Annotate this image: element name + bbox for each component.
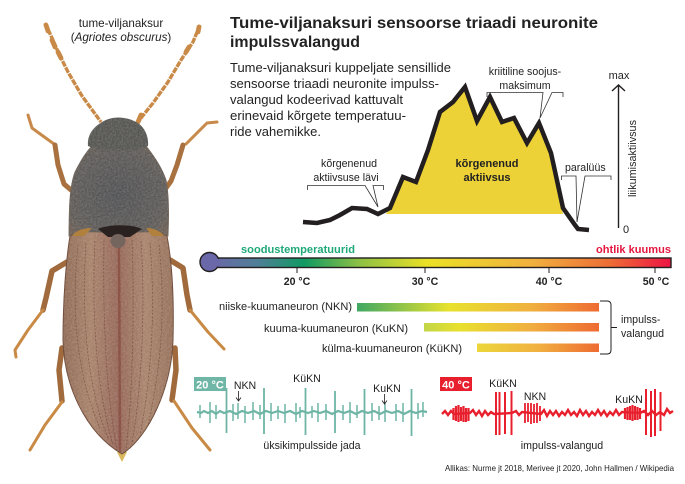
- title: [230, 15, 598, 51]
- source credit: Allikas: Nurme jt 2018, Merivee jt 2020, John Hallmen / Wikipedia: [445, 463, 674, 473]
- chart label: elevated activity: [456, 158, 518, 184]
- icon: beetle elytra: [63, 228, 173, 454]
- burst label: NKN: NKN: [524, 391, 546, 403]
- intro text: erinevaid kõrgete temperatuu-: [230, 108, 406, 123]
- icon: beetle abdomen tip: [117, 452, 127, 462]
- title: impulssvalangud: [230, 34, 360, 51]
- scale ticks: [297, 267, 655, 273]
- axis: locomotor activity arrow: liikumisaktiivsus: [627, 120, 639, 197]
- spike label: NKN: NKN: [234, 380, 256, 392]
- chart label: elevated activity: aktiivsus: [463, 172, 511, 184]
- waveform: bursts: [442, 389, 673, 437]
- icon: beetle legs: [15, 115, 224, 450]
- bracket: impulse bursts: impulss-: [621, 314, 661, 326]
- neuron range: NKN: [219, 301, 599, 313]
- intro text: ride vahemikke.: [230, 124, 321, 139]
- intro text: valangud kodeerivad kattuvalt: [230, 92, 403, 107]
- callout: activity threshold: kõrgenenud: [321, 158, 377, 170]
- bursts at 40 °C: [440, 377, 673, 452]
- temperature scale: [200, 244, 671, 288]
- scale zone labels: [241, 244, 671, 256]
- beetle label: (Agriotes obscurus): [71, 31, 171, 44]
- burst label: KüKN: KüKN: [489, 378, 517, 390]
- title: Tume-viljanaksuri sensoorse triaadi neuronite: [230, 15, 598, 32]
- callout: activity threshold: [308, 158, 384, 207]
- axis: locomotor activity arrow: [609, 70, 639, 236]
- scale temperature labels: 20 °C: [284, 276, 311, 288]
- neuron range: NKN: niiske-kuumaneuron (NKN): [219, 301, 352, 313]
- spike label: NKN: [234, 380, 256, 401]
- temperature badge: 40 °C: 40 °C: [442, 380, 470, 392]
- temperature badge: 20 °C: 20 °C: [196, 380, 224, 392]
- scale zone labels: soodustemperatuurid: [241, 244, 355, 256]
- intro text: Tume-viljanaksuri kuppeljate sensillide: [230, 60, 451, 75]
- intro text: [230, 60, 451, 139]
- neuron range: KuKN: [264, 323, 599, 335]
- chart label: elevated activity: kõrgenenud: [456, 158, 518, 170]
- bracket: impulse bursts: valangud: [621, 328, 664, 340]
- callout: paralysis: paralüüs: [565, 162, 606, 174]
- chart line: activity: [303, 87, 589, 230]
- callout: critical thermal maximum: kriitiline soojus-: [489, 66, 562, 78]
- activity chart: [303, 66, 639, 236]
- spike label: KuKN: KuKN: [373, 383, 401, 395]
- beetle label: [71, 17, 171, 44]
- neuron range: KüKN: külma-kuumaneuron (KüKN): [322, 343, 462, 355]
- scale temperature labels: 40 °C: [536, 276, 563, 288]
- callout: critical thermal maximum: [487, 66, 563, 118]
- scale temperature labels: 30 °C: [412, 276, 439, 288]
- axis: locomotor activity arrow: 0: [623, 224, 629, 236]
- burst label: KuKN: KuKN: [615, 394, 643, 406]
- icon: beetle head: [88, 118, 148, 150]
- callout: activity threshold: aktiivsuse lävi: [313, 172, 379, 184]
- scale temperature labels: 50 °C: [643, 276, 670, 288]
- scale zone labels: ohtlik kuumus: [596, 244, 671, 256]
- spike train at 20 °C: [194, 373, 427, 452]
- intro text: sensoorse triaadi neuronite impulss-: [230, 76, 439, 91]
- neuron range: KuKN: kuuma-kuumaneuron (KuKN): [264, 323, 408, 335]
- neuron range: KüKN: [322, 343, 599, 355]
- scale bulb and bar: [200, 252, 671, 272]
- waveform caption: impulss-valangud: [521, 440, 603, 452]
- icon: beetle pronotum: [69, 142, 169, 248]
- callout: critical thermal maximum: maksimum: [499, 80, 551, 92]
- waveform: single spikes: [197, 388, 427, 436]
- chart area: elevated activity: [386, 87, 563, 214]
- beetle illustration: [15, 23, 224, 462]
- neuron temperature ranges: [219, 301, 664, 355]
- axis: locomotor activity arrow: max: [609, 70, 630, 82]
- waveform caption: üksikimpulsside jada: [263, 440, 361, 452]
- spike label: KuKN: [373, 383, 401, 404]
- scale temperature labels: [284, 276, 670, 288]
- callout: paralysis: [562, 162, 611, 222]
- icon: beetle antennae: [45, 23, 200, 123]
- bracket: impulse bursts: [600, 301, 664, 354]
- beetle label: tume-viljanaksur: [79, 17, 163, 30]
- spike label: KüKN: KüKN: [293, 373, 321, 385]
